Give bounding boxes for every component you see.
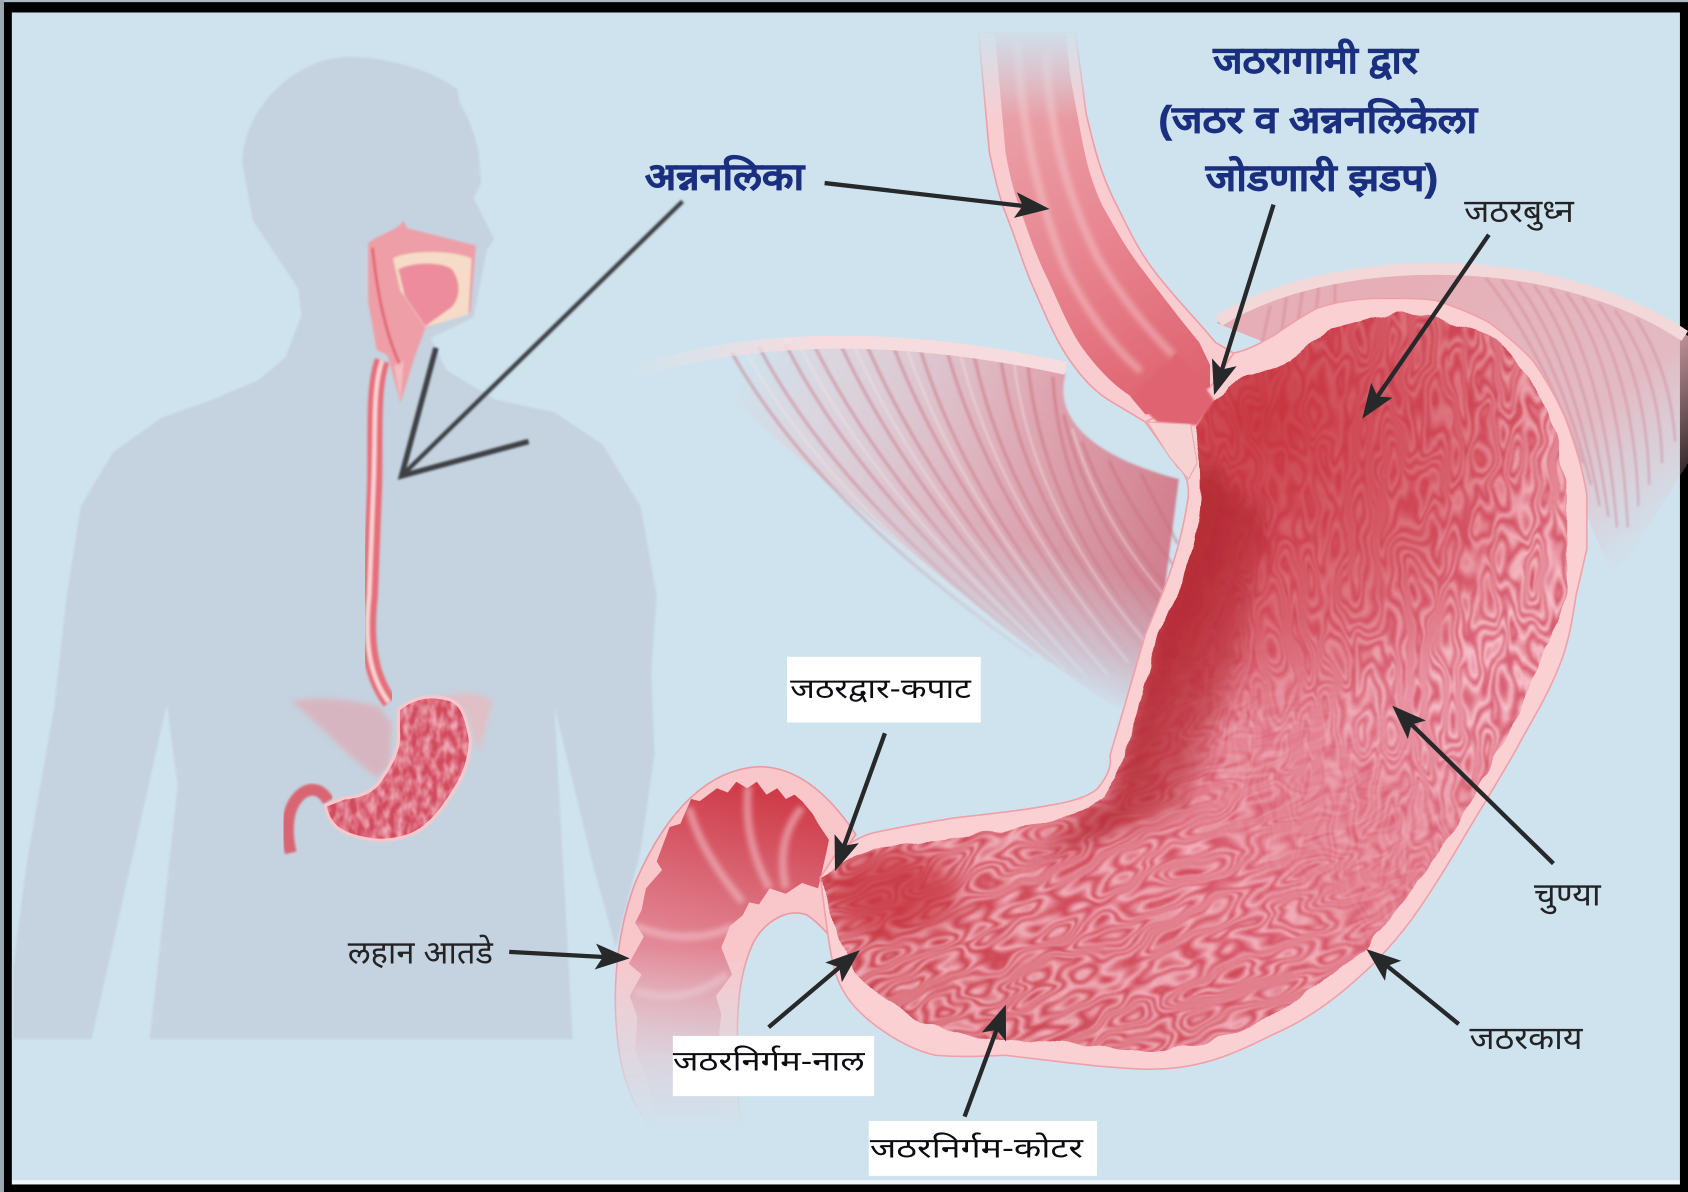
- label: rugae: चुण्या: [1534, 877, 1601, 915]
- esophagus muscle streaks: [1017, 43, 1173, 371]
- arrow: pyloric canal: [769, 955, 854, 1027]
- label box: pyloric canal: जठरनिर्गम-नाल: [673, 1044, 865, 1076]
- mucosa base colour: [820, 312, 1568, 1052]
- diagonal rugae of the antrum: [821, 642, 1471, 1052]
- heading: cardiac sphincter: (जठर व अन्ननलिकेला: [1158, 97, 1478, 140]
- heading: cardiac sphincter: जठरागामी द्वार: [1212, 38, 1419, 81]
- label box: pyloric antrum: जठरनिर्गम-कोटर: [870, 1132, 1084, 1164]
- lesser curve shadow: [1033, 452, 1270, 861]
- label: gastric body: जठरकाय: [1469, 1020, 1584, 1056]
- arrow: fundus: [1367, 235, 1489, 412]
- arrow: pyloric antrum: [965, 1012, 1003, 1117]
- arrow: small intestine: [509, 952, 622, 958]
- intestine fold shading: [636, 785, 806, 1000]
- esophagus lumen: [995, 32, 1210, 415]
- arrow: pyloric sphincter: [838, 733, 885, 864]
- big arrow: esophagus location on body: [402, 201, 683, 476]
- small stomach body: [325, 697, 470, 840]
- arrow: rugae: [1398, 711, 1553, 864]
- label box: pyloric sphincter: जठरद्वार-कपाट: [790, 673, 972, 704]
- label box: pyloric antrum: [869, 1121, 1097, 1176]
- small stomach diagram: [288, 693, 493, 853]
- intestine lumen with folds: [628, 782, 829, 1050]
- small esophagus tube: [367, 361, 390, 702]
- small diaphragm: [291, 693, 493, 777]
- label: fundus: जठरबुध्न: [1464, 193, 1575, 231]
- label: esophagus: अन्ननलिका: [645, 155, 806, 198]
- white strip inside frame bottom: [12, 1180, 1680, 1184]
- arrow: body: [1372, 954, 1459, 1024]
- human silhouette: [13, 57, 657, 1039]
- diaphragm left fan: [635, 342, 1179, 711]
- intestine wall: [615, 767, 856, 1136]
- vertical rugae of the stomach body: [1180, 312, 1568, 951]
- right diaphragm band: [1219, 269, 1685, 336]
- left diaphragm band: [635, 342, 1066, 371]
- arrow: esophagus label to tube: [825, 183, 1042, 208]
- heading: cardiac sphincter: [1158, 38, 1478, 199]
- esophagus section: [979, 32, 1234, 422]
- small nasal and oral cavity: [368, 221, 476, 403]
- pale wedge at junction: [1148, 422, 1197, 479]
- small stomach folds: [323, 695, 474, 840]
- stomach inner mucosa with rugae folds: [820, 311, 1568, 1052]
- label: small intestine: लहान आतडे: [348, 935, 494, 971]
- diaphragm right fan: [1216, 269, 1688, 581]
- arrows: [509, 183, 1553, 1117]
- small intestine section: [615, 767, 856, 1136]
- small duodenum: [288, 790, 328, 853]
- fundus shadow: [1152, 312, 1555, 714]
- heading: cardiac sphincter: जोडणारी झडप): [1205, 156, 1438, 199]
- esophagus outer wall: [979, 32, 1234, 422]
- label box: pyloric sphincter: [787, 657, 981, 723]
- pyloric shadow: [829, 853, 958, 935]
- small anatomy: head and esophagus: [367, 221, 476, 702]
- label box: pyloric canal: [673, 1036, 874, 1096]
- stomach wall: [820, 298, 1587, 1069]
- arrow: sphincter: [1216, 205, 1274, 388]
- esophagus junction zigzag: [1133, 353, 1214, 425]
